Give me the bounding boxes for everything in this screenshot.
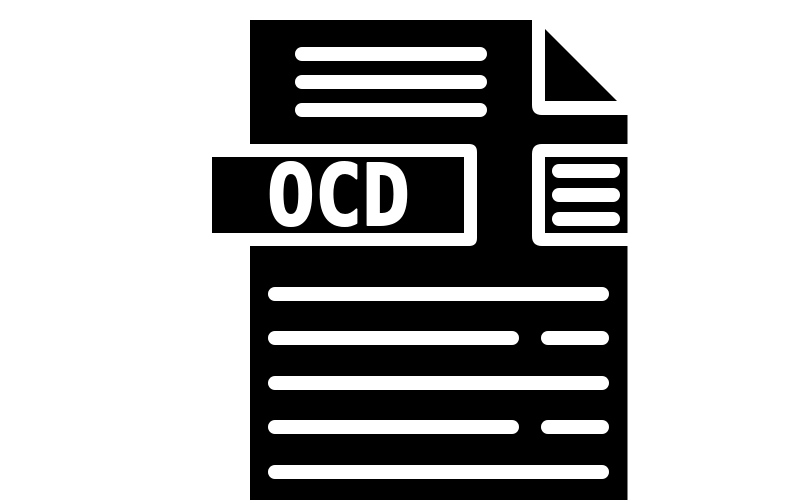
top text lines (295, 47, 487, 117)
right side tab with lines (532, 144, 628, 246)
document page body (250, 20, 628, 500)
OCD label band (212, 144, 477, 246)
folded corner triangle (545, 29, 617, 101)
bottom text lines (268, 287, 609, 479)
label text: OCD (267, 147, 410, 246)
